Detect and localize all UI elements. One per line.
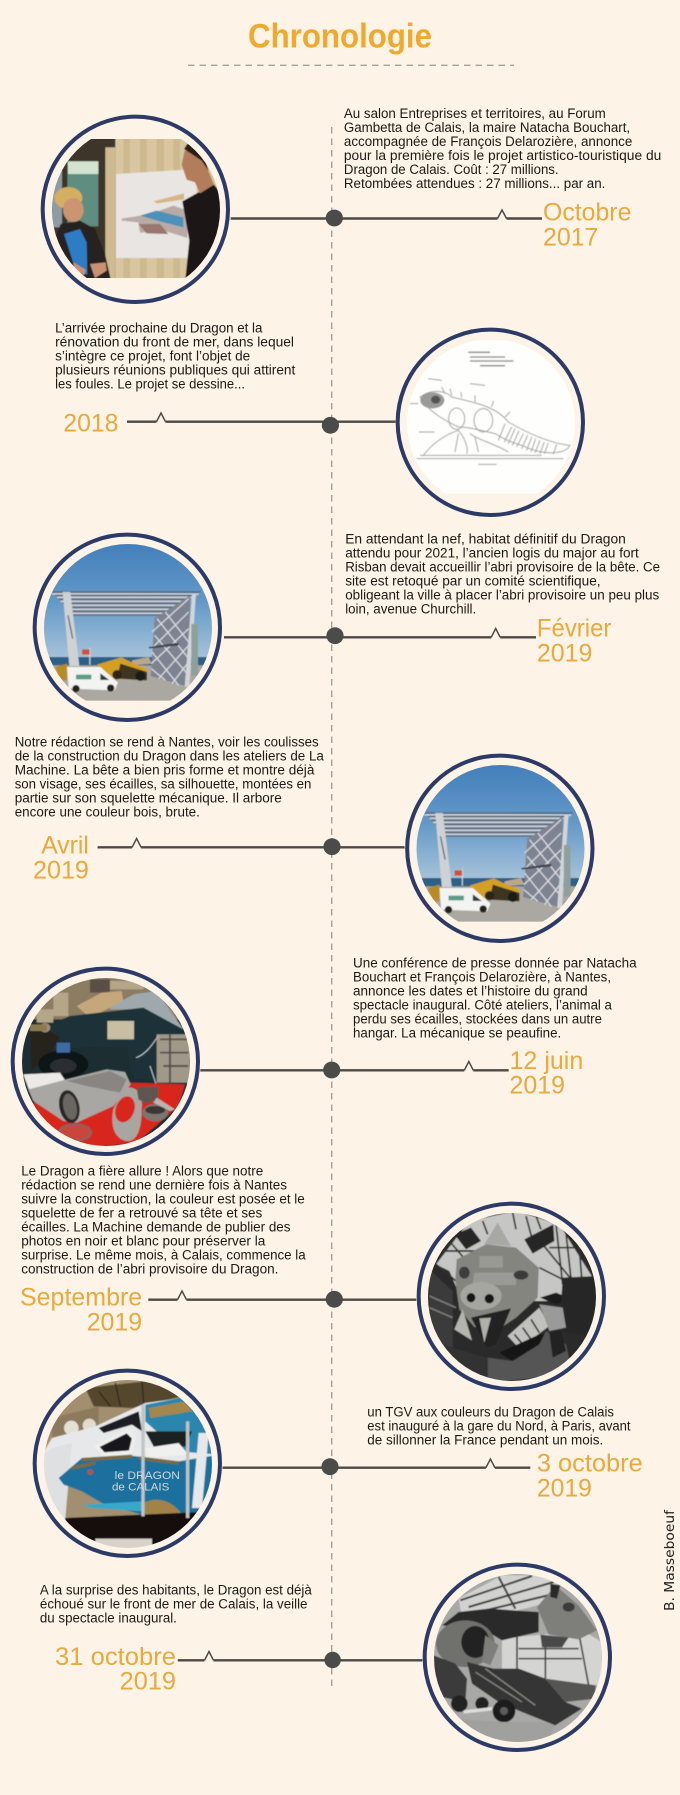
date label: 2019 bbox=[537, 1475, 592, 1503]
text block: hangar. La mécanique se peaufine. bbox=[353, 1026, 561, 1042]
text block bbox=[367, 1405, 631, 1449]
text block: squelette de fer a retrouvé sa tête et ses bbox=[21, 1206, 262, 1222]
text block: surprise. Le même mois, à Calais, commence la bbox=[21, 1248, 306, 1264]
panel: event février 2019 bbox=[32, 531, 660, 724]
text block: Dragon de Calais. Coût : 27 millions. bbox=[344, 162, 559, 178]
text block bbox=[40, 1582, 312, 1626]
text block: du spectacle inaugural. bbox=[40, 1610, 177, 1626]
date label bbox=[55, 1643, 176, 1695]
date label bbox=[537, 615, 611, 668]
text block bbox=[55, 321, 295, 393]
connector line bbox=[127, 413, 396, 422]
text block: les foules. Le projet se dessine... bbox=[55, 377, 245, 393]
date label: 2019 bbox=[510, 1072, 565, 1100]
text block bbox=[353, 956, 637, 1042]
text block: Machine. La bête a bien pris forme et montre déjà bbox=[15, 763, 314, 779]
text block: de sillonner la France pendant un mois. bbox=[367, 1433, 603, 1449]
date label bbox=[510, 1047, 583, 1100]
text block: s’intègre ce projet, font l’objet de bbox=[55, 349, 250, 365]
photo: black and white dragon head bbox=[416, 1201, 608, 1393]
panel: event 12 juin 2019 bbox=[10, 956, 637, 1158]
panel: event 31 octobre 2019 bbox=[40, 1562, 614, 1754]
date label: 3 octobre bbox=[537, 1450, 643, 1478]
text block: loin, avenue Churchill. bbox=[345, 601, 476, 617]
date label: 2019 bbox=[120, 1667, 176, 1695]
text block: pour la première fois le projet artistico-touristique du bbox=[344, 148, 661, 164]
timeline dot bbox=[321, 1458, 339, 1475]
timeline dot bbox=[323, 1062, 340, 1078]
text block bbox=[15, 735, 324, 821]
text block bbox=[345, 531, 660, 617]
timeline dot bbox=[326, 627, 344, 644]
text block: Le Dragon a fière allure ! Alors que notre bbox=[21, 1164, 263, 1180]
date label: 2018 bbox=[63, 410, 118, 438]
text block bbox=[21, 1164, 306, 1278]
text block: L’arrivée prochaine du Dragon et la bbox=[55, 321, 262, 337]
photo: workshop with truck chassis and metal tubes bbox=[10, 966, 202, 1158]
connector line bbox=[224, 628, 536, 637]
connector line bbox=[98, 838, 405, 847]
panel: event avril 2019 bbox=[15, 735, 596, 945]
date label: 2019 bbox=[537, 640, 592, 668]
text block bbox=[344, 106, 661, 192]
date label: Septembre bbox=[20, 1284, 142, 1312]
panel: event octobre 2017 bbox=[40, 106, 661, 306]
text block: Bouchart et François Delarozière, à Nantes, bbox=[353, 970, 611, 986]
timeline dot bbox=[322, 417, 339, 434]
date label: 2019 bbox=[87, 1309, 142, 1337]
text block: un TGV aux couleurs du Dragon de Calais bbox=[367, 1405, 614, 1421]
text block: plusieurs réunions publiques qui attirent bbox=[55, 363, 295, 379]
text block: rédaction se rend une dernière fois à Nantes bbox=[21, 1178, 287, 1194]
photo: provisional shelter repeated bbox=[404, 753, 596, 945]
text block: Risban devait accueillir l’abri provisoire de la bête. Ce bbox=[345, 559, 660, 575]
text block: rénovation du front de mer, dans lequel bbox=[55, 335, 294, 351]
text block: de la construction du Dragon dans les ateliers de La bbox=[15, 749, 324, 765]
text block: échoué sur le front de mer de Calais, la veille bbox=[40, 1596, 308, 1612]
text block: photos en noir et blanc pour préserver la bbox=[21, 1234, 265, 1250]
text block: spectacle inaugural. Côté ateliers, l’animal a bbox=[353, 998, 612, 1014]
photo: TGV painted with the Dragon de Calais livery: le DRAGON bbox=[115, 1470, 180, 1482]
date label: Avril bbox=[41, 831, 89, 859]
credit: author: B. Masseboeuf bbox=[662, 1509, 678, 1611]
text block: site est retoqué par un comité scientifique, bbox=[345, 573, 601, 589]
date label bbox=[20, 1284, 142, 1337]
panel: event 3 octobre 2019 bbox=[32, 1368, 643, 1560]
text block: suivre la construction, la couleur est posée et le bbox=[21, 1192, 305, 1208]
date label: Février bbox=[537, 615, 611, 643]
text block: obligeant la ville à placer l’abri provisoire un peu plus bbox=[345, 587, 659, 603]
date label: 31 octobre bbox=[55, 1643, 176, 1671]
text block: encore une couleur bois, brute. bbox=[15, 805, 200, 821]
text block: son visage, ses écailles, sa silhouette, montées en bbox=[15, 777, 311, 793]
date label bbox=[537, 1450, 643, 1503]
title: Chronologie bbox=[248, 18, 432, 56]
panel: event septembre 2019 bbox=[20, 1164, 608, 1393]
text block: perdu ses écailles, stockées dans un autre bbox=[353, 1012, 602, 1028]
text block: construction de l’abri provisoire du Dragon. bbox=[21, 1262, 278, 1278]
timeline dot bbox=[324, 1652, 341, 1668]
date label: 2017 bbox=[543, 224, 598, 252]
date label: 12 juin bbox=[510, 1047, 583, 1075]
text block: A la surprise des habitants, le Dragon est déjà bbox=[40, 1582, 312, 1598]
text block: Une conférence de presse donnée par Natacha bbox=[353, 956, 637, 972]
central timeline axis bbox=[331, 127, 333, 1688]
text block: partie sur son squelette mécanique. Il arbore bbox=[15, 791, 282, 807]
date label bbox=[33, 831, 89, 884]
connector line bbox=[231, 210, 542, 218]
connector line bbox=[200, 1062, 509, 1070]
date label: 2019 bbox=[33, 856, 89, 884]
text block: accompagnée de François Delarozière, annonce bbox=[344, 134, 632, 150]
photo: TGV painted with the Dragon de Calais livery bbox=[32, 1368, 224, 1560]
date label: Octobre bbox=[543, 199, 631, 227]
timeline dot bbox=[323, 838, 341, 855]
text block: Notre rédaction se rend à Nantes, voir les coulisses bbox=[15, 735, 319, 751]
text block: Retombées attendues : 27 millions... par an. bbox=[344, 176, 605, 192]
photo: pencil sketch of the dragon bbox=[398, 330, 583, 515]
photo: the mayor and the artist presenting the dragon drawing bbox=[40, 114, 232, 306]
text block: écailles. La Machine demande de publier des bbox=[21, 1220, 290, 1236]
text block: Gambetta de Calais, la maire Natacha Bouchart, bbox=[344, 120, 630, 136]
connector line bbox=[148, 1291, 416, 1300]
text block: attendu pour 2021, l’ancien logis du major au fort bbox=[345, 545, 639, 561]
photo: black and white full dragon in the hangar bbox=[422, 1562, 614, 1754]
text block: En attendant la nef, habitat définitif du Dragon bbox=[345, 531, 626, 547]
photo: TGV painted with the Dragon de Calais livery: de CALAIS bbox=[112, 1481, 169, 1493]
text block: est inauguré à la gare du Nord, à Paris, avant bbox=[367, 1419, 631, 1435]
connector line bbox=[178, 1652, 422, 1660]
photo: provisional shelter under construction bbox=[32, 532, 224, 724]
timeline dot bbox=[326, 210, 343, 226]
text block: Au salon Entreprises et territoires, au Forum bbox=[344, 106, 606, 122]
panel: event 2018 bbox=[55, 321, 583, 515]
date label bbox=[543, 199, 631, 252]
timeline dot bbox=[326, 1291, 343, 1308]
text block: annonce les dates et l’histoire du grand bbox=[353, 984, 588, 1000]
connector line bbox=[222, 1459, 530, 1468]
